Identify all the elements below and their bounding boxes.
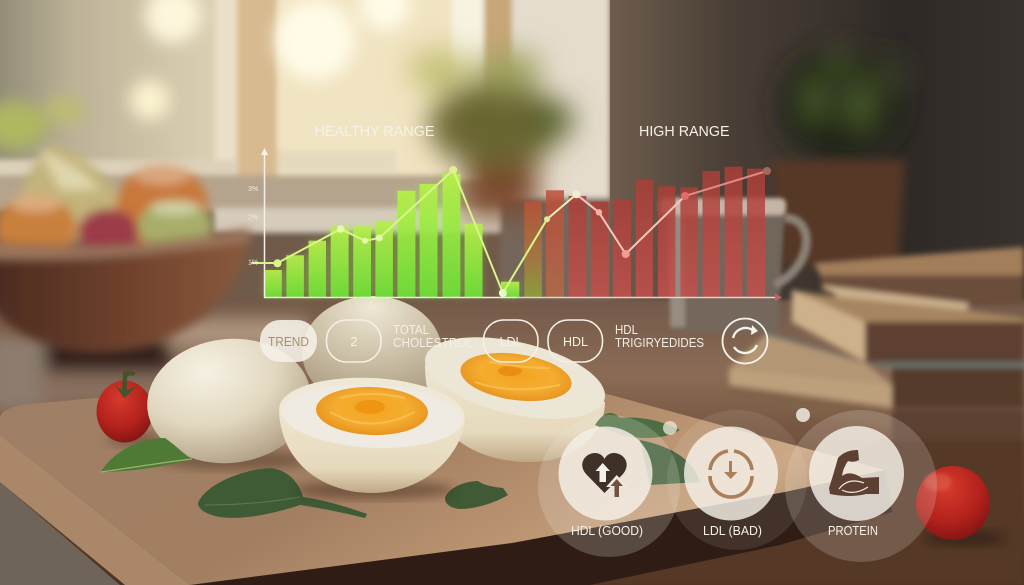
pill: LDL: LDL — [500, 335, 523, 349]
icon: refresh — [722, 318, 768, 364]
spinach leaf left — [101, 438, 192, 472]
green healthy bars — [264, 174, 519, 297]
badge: protein: PROTEIN — [828, 524, 878, 538]
label: total cholesterol: TOTAL — [393, 323, 429, 337]
badge: protein — [809, 426, 904, 538]
pill: trend: TREND — [268, 335, 309, 349]
pill: 2 — [326, 320, 381, 362]
icon: heart with up arrows — [582, 453, 628, 497]
icon: circle with down arrow — [710, 451, 752, 497]
blurred coffee mug — [660, 198, 806, 332]
y axis tick labels — [248, 186, 258, 266]
pill: HDL: HDL — [563, 335, 588, 349]
blurred book stack — [729, 247, 1024, 443]
pill: LDL — [484, 320, 538, 362]
label: total cholesterol — [393, 323, 473, 350]
front halved egg — [277, 373, 467, 499]
cutting board — [0, 392, 892, 585]
range labels — [314, 124, 730, 140]
range labels: HIGH RANGE — [639, 124, 730, 140]
metric badges — [538, 408, 937, 562]
glow behind green bars — [264, 174, 519, 297]
spinach leaf small — [445, 481, 508, 509]
spinach leaf centre — [198, 468, 367, 518]
pill: HDL — [548, 320, 602, 362]
y axis tick labels: 1% — [248, 260, 258, 266]
whole egg — [141, 331, 317, 471]
label: HDL triglycerides — [615, 323, 704, 350]
chart: cholesterol ranges — [248, 124, 782, 301]
trend line — [252, 170, 767, 293]
badge: HDL good — [558, 426, 652, 538]
spinach leaves behind icons — [595, 413, 700, 485]
table — [0, 300, 1024, 585]
badge: LDL bad: LDL (BAD) — [703, 524, 762, 538]
label: HDL triglycerides: HDL — [615, 323, 638, 337]
badge: HDL good: HDL (GOOD) — [571, 524, 643, 538]
blurred plant and pot on the right — [772, 48, 905, 264]
label: HDL triglycerides: TRIGIRYEDIDES — [615, 336, 704, 350]
back whole egg — [302, 296, 442, 408]
pill: 2: 2 — [350, 334, 358, 349]
range labels: HEALTHY RANGE — [314, 124, 435, 140]
filter pill row — [260, 318, 768, 364]
pill: trend — [260, 320, 317, 362]
red cherry tomato right — [916, 466, 1005, 546]
y axis tick labels: 2% — [248, 214, 258, 222]
cherry tomato with stem — [96, 370, 163, 447]
dark wooden table foreground — [0, 440, 1024, 585]
right halved egg — [417, 322, 613, 462]
red high bars — [524, 167, 765, 297]
y axis tick labels: 3% — [248, 186, 258, 193]
axes — [261, 148, 782, 301]
trend points — [274, 166, 771, 297]
badge: LDL bad — [684, 426, 778, 538]
label: total cholesterol: CHOLESTROL — [393, 336, 473, 350]
blurred fruit bowl — [0, 145, 250, 352]
icon: flexed arm — [829, 450, 879, 496]
blurred plant by window — [408, 48, 574, 215]
decorative halos — [538, 415, 680, 557]
blurred tabletop light and bowl shadow — [0, 318, 305, 410]
